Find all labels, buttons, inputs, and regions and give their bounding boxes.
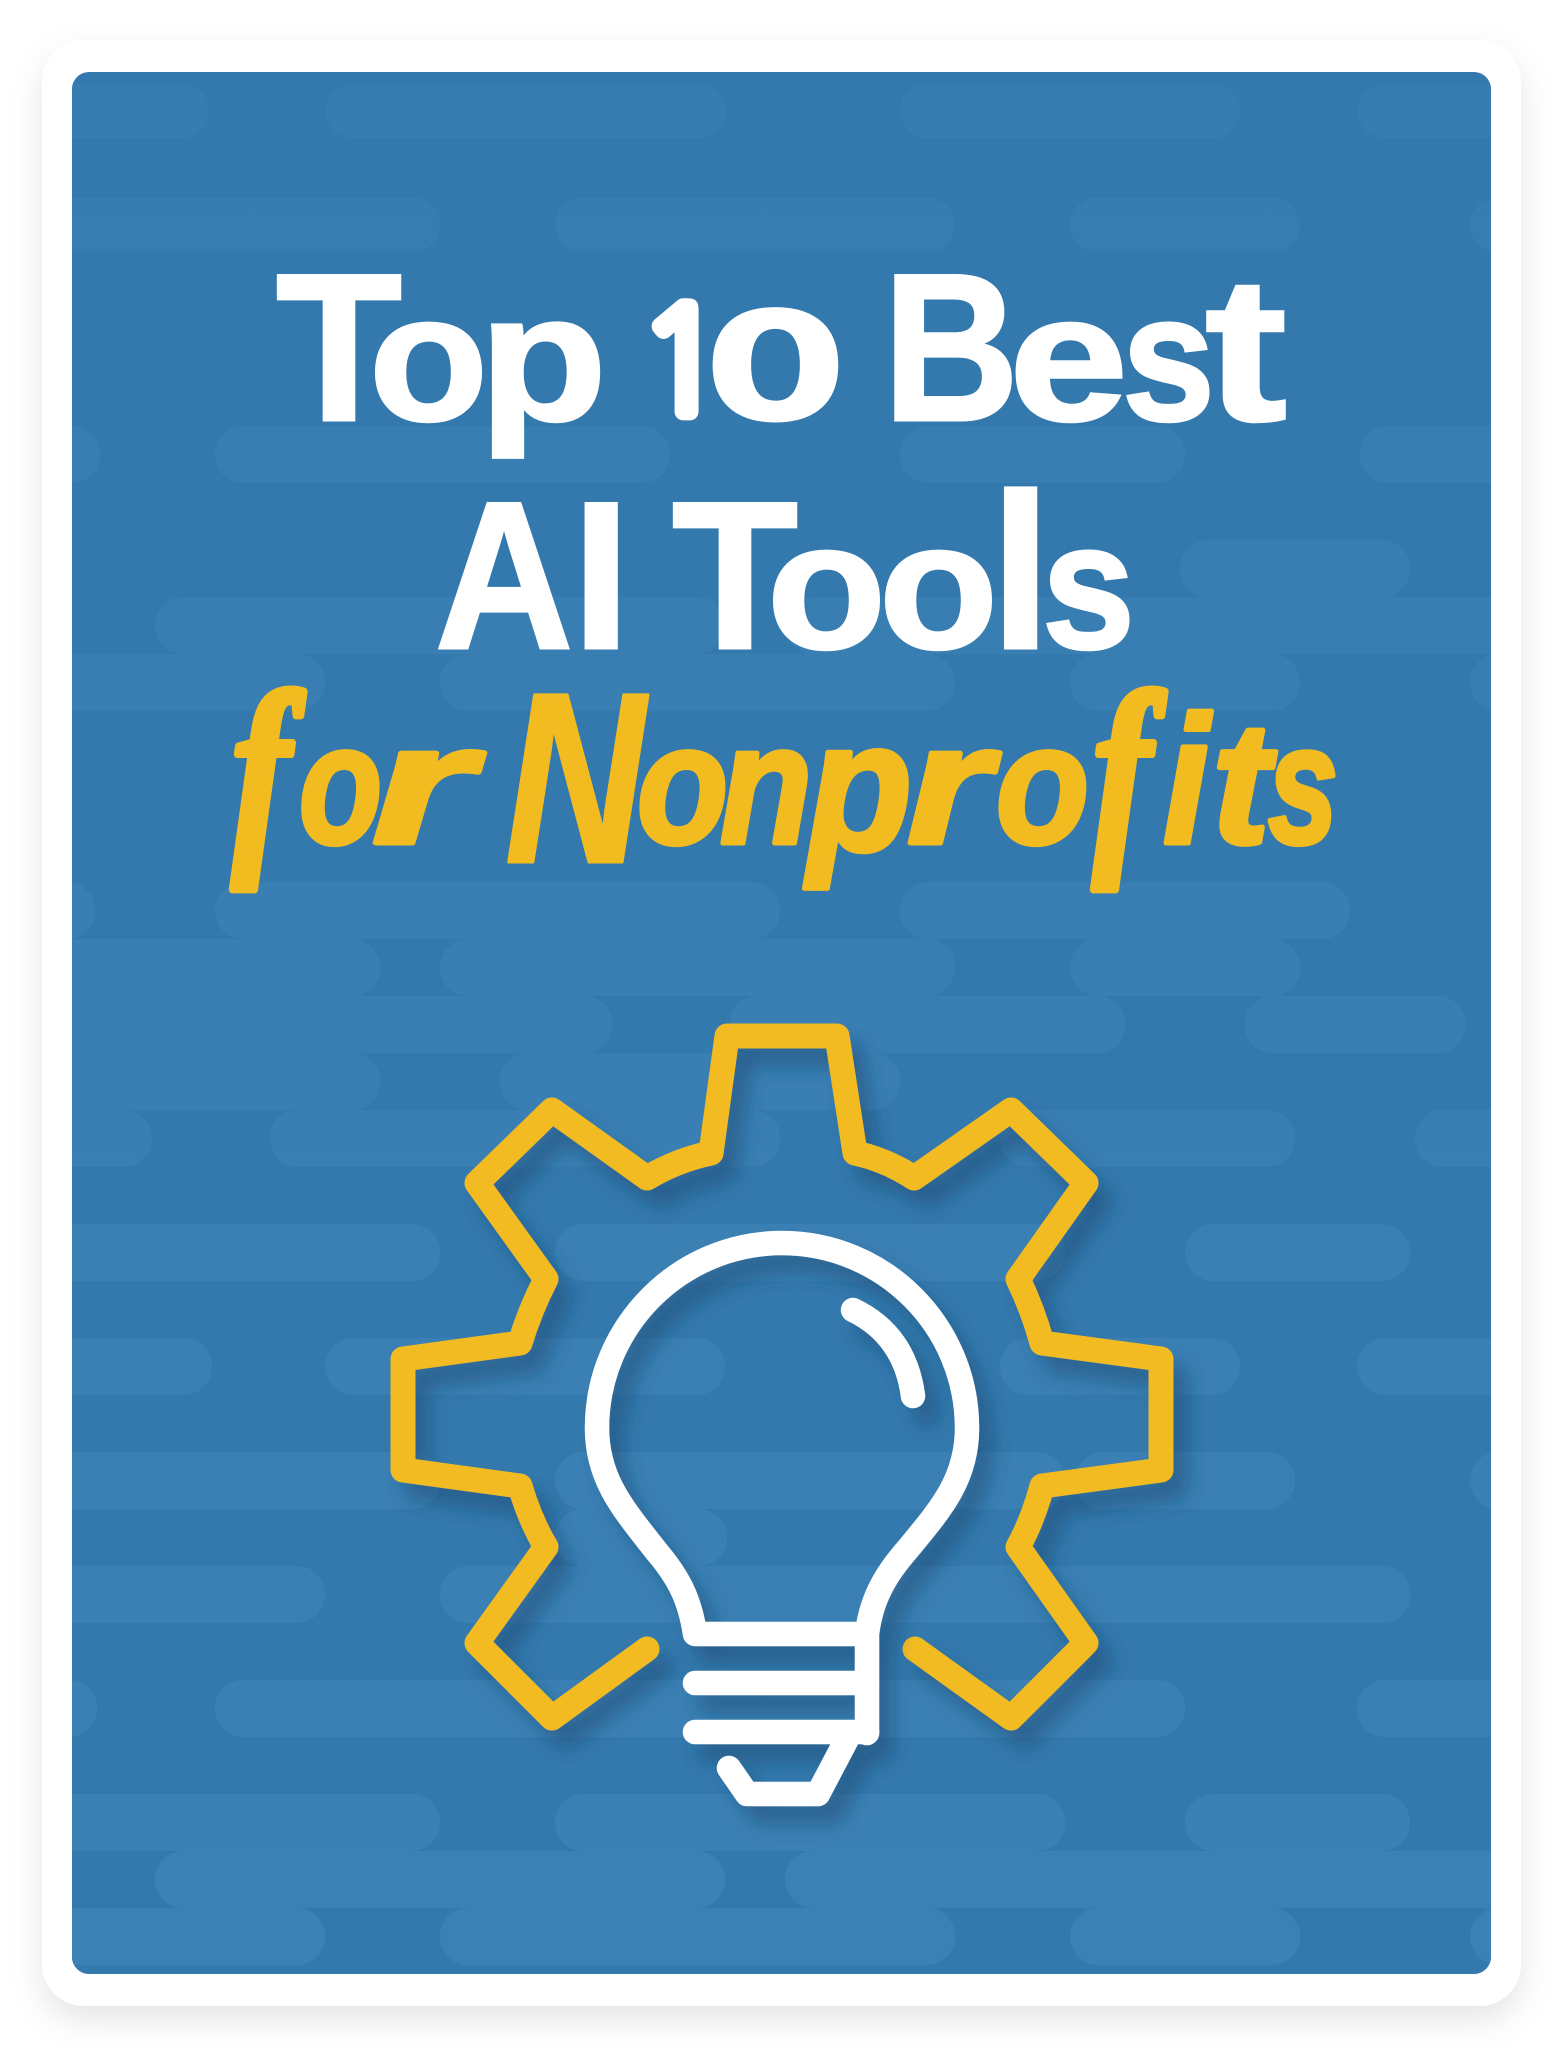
title line 1: o: [369, 258, 488, 459]
title line 1: 1: [638, 289, 726, 434]
title line 3: script: o: [996, 690, 1089, 880]
title line 3: script: n: [720, 690, 812, 880]
title line 1: B: [883, 230, 1019, 465]
title line 3: script: f: [232, 650, 305, 891]
title line 3: script: f: [1093, 650, 1166, 891]
title line 1: p: [479, 258, 607, 459]
title line 2: o: [879, 486, 998, 687]
title line 3: script: N: [505, 643, 649, 914]
title line 3: script: r: [372, 690, 484, 880]
icon: light bulb: [597, 1243, 967, 1794]
title: [232, 230, 1338, 914]
icon: gear: [403, 1036, 1161, 1718]
title line 2: A: [435, 458, 573, 693]
title line 2: I: [572, 458, 630, 693]
title line 3: script: r: [907, 690, 1000, 880]
title line 1: e: [1009, 258, 1128, 459]
title line 1: T: [276, 230, 402, 465]
title line 2: l: [990, 448, 1051, 695]
title line 3: script: i: [1163, 678, 1212, 882]
title line 3: script: o: [637, 690, 728, 880]
title line 1: t: [1205, 235, 1287, 464]
title line 2: T: [672, 458, 798, 693]
title line 3: script: t: [1212, 686, 1276, 880]
title line 3: script: p: [803, 684, 912, 890]
title line 2: s: [1042, 486, 1135, 687]
title line 3: script: o: [299, 690, 382, 880]
title line 3: script: s: [1268, 690, 1338, 880]
title line 2: o: [767, 486, 886, 687]
title line 1: s: [1122, 258, 1215, 459]
title line 1: 0: [707, 287, 844, 448]
